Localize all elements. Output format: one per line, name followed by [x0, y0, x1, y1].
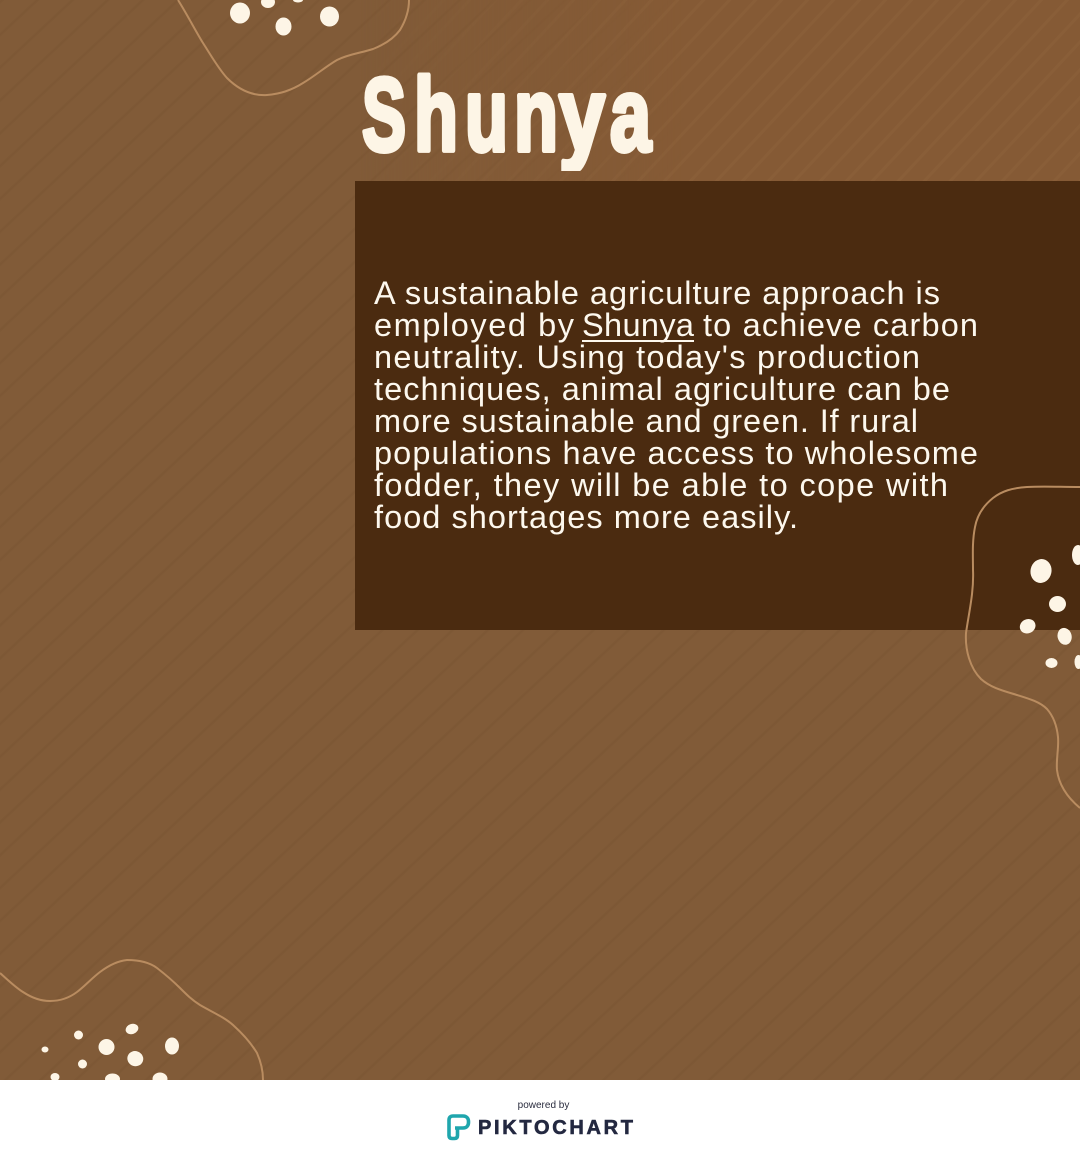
decoration: right blob	[966, 487, 1080, 808]
body text: A sustainable agriculture approach is	[374, 275, 940, 311]
body text: to achieve carbon	[703, 307, 978, 343]
title: u	[465, 58, 508, 174]
body text: fodder, they will be able to cope with	[374, 467, 948, 503]
body text	[374, 275, 978, 535]
footer	[0, 1080, 1080, 1160]
title: S	[362, 58, 406, 174]
title	[362, 72, 654, 171]
body text: more sustainable and green. If rural	[374, 403, 918, 439]
body text: Shunya	[582, 307, 695, 343]
powered by: powered by	[518, 1100, 569, 1111]
title: h	[414, 58, 458, 174]
link underline	[582, 340, 694, 342]
text panel	[355, 181, 1080, 630]
decoration: bottom blob	[0, 960, 263, 1086]
decoration: top blob	[178, 0, 409, 95]
body text: populations have access to wholesome	[374, 435, 978, 471]
body text: food shortages more easily.	[374, 499, 798, 535]
body text: employed by	[374, 307, 575, 343]
icon: piktochart logo	[449, 1116, 468, 1138]
title: a	[610, 58, 652, 174]
body text: techniques, animal agriculture can be	[374, 371, 950, 407]
piktochart wordmark: PIKTOCHART	[478, 1117, 633, 1139]
title: n	[514, 58, 558, 174]
body text: neutrality. Using today's production	[374, 339, 920, 375]
title: y	[559, 58, 605, 174]
